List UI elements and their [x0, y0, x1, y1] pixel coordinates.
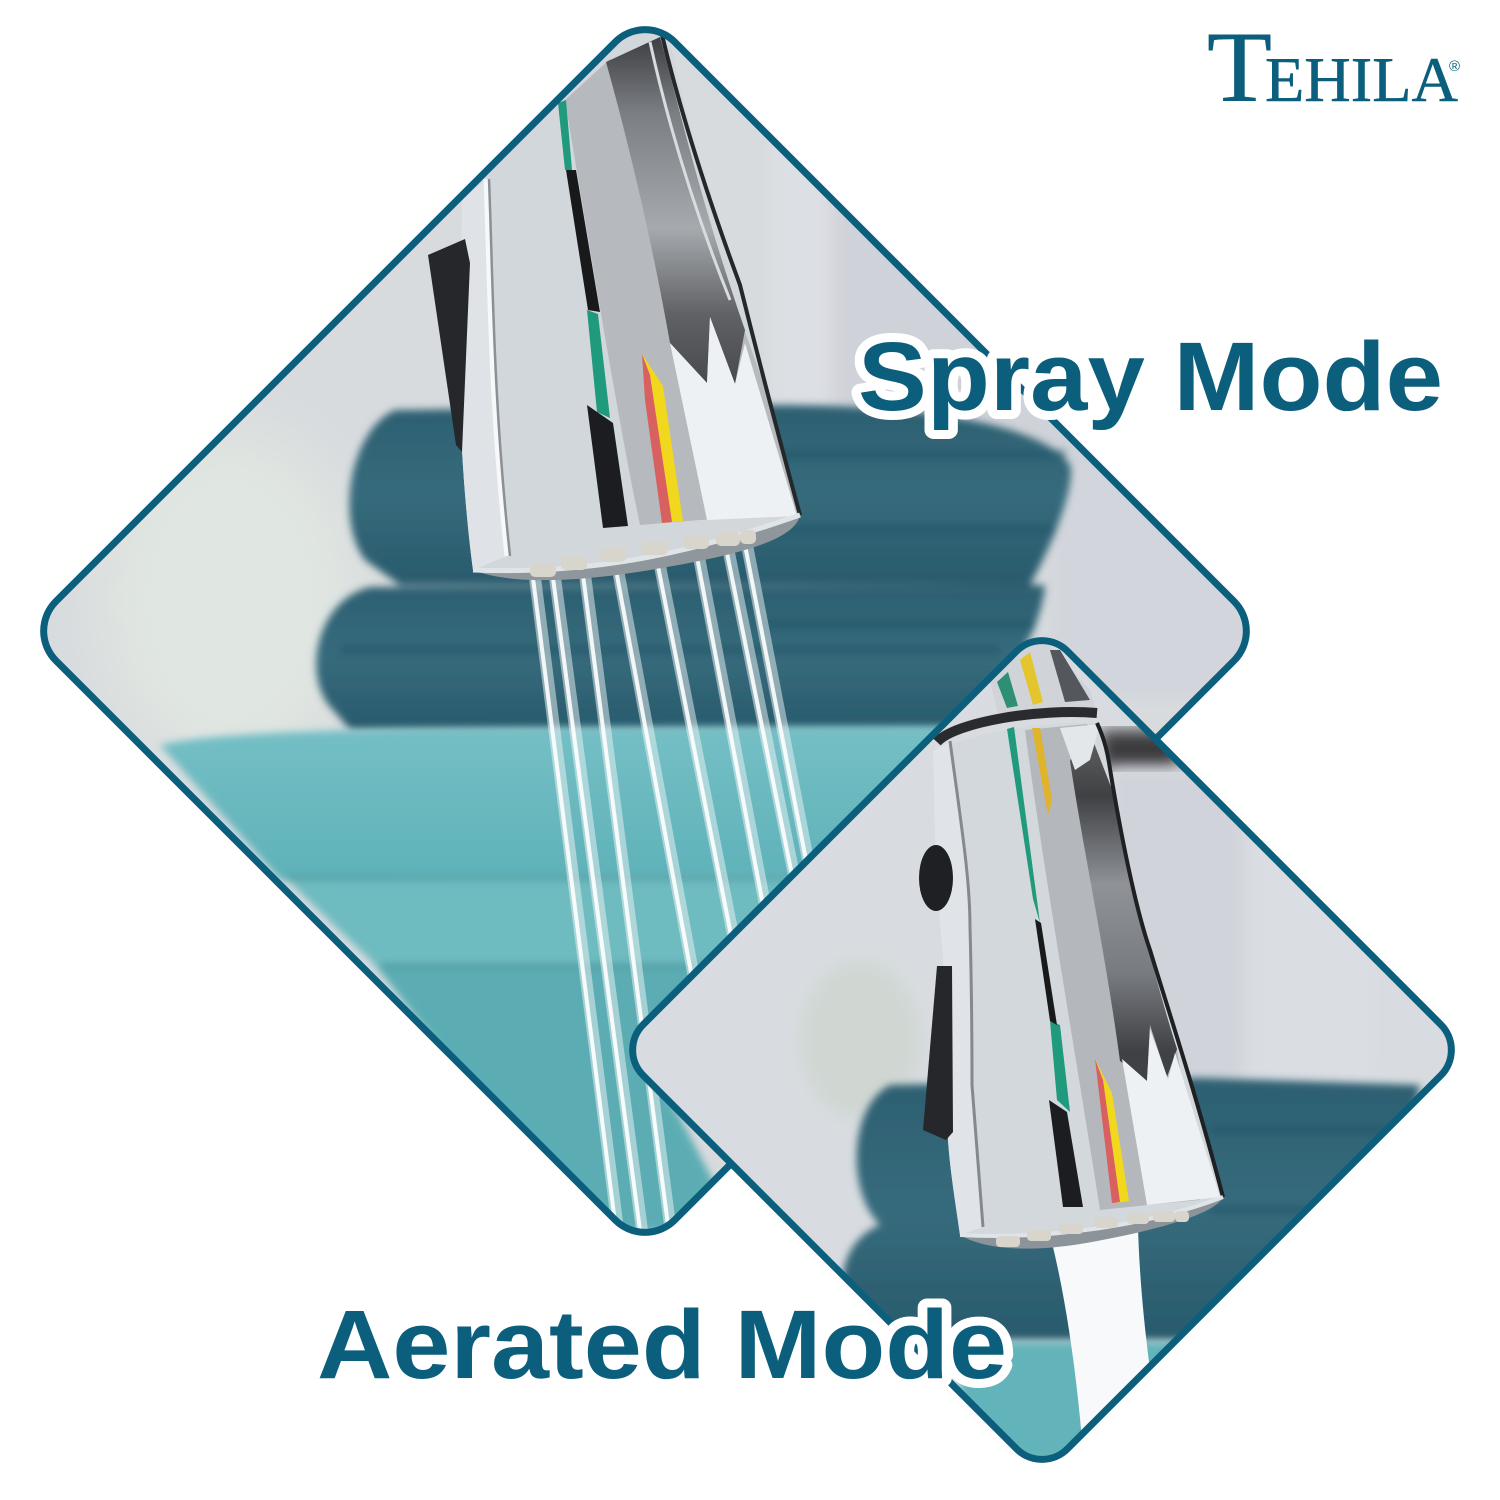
reflection: white highlights: [670, 317, 797, 520]
logo: Tehila: T: [1207, 11, 1272, 123]
photo background: [47, 42, 1243, 1180]
reflection: black stripes: [566, 170, 600, 312]
logo: Tehila: EHILA: [1265, 45, 1458, 115]
label: Aerated Mode: Aerated Mode: [317, 1290, 1007, 1399]
reflection: coloured stripes: [1095, 1059, 1129, 1203]
black lever: [428, 239, 470, 452]
nozzles: [996, 1211, 1189, 1247]
water jets: [533, 545, 808, 1230]
light teal towel stack: [160, 726, 960, 1232]
rim underside: [960, 1197, 1223, 1249]
photo background: [636, 649, 1448, 1390]
black pause button: [919, 845, 953, 911]
faucet head, spray mode: [460, 20, 800, 580]
dark towel stack: [316, 405, 1071, 730]
logo: Tehila: [1207, 11, 1460, 123]
reflection: black stripes: [1035, 919, 1057, 1025]
upper tube: [990, 635, 1097, 722]
water stream: [1053, 1232, 1149, 1430]
nozzles: [530, 530, 756, 577]
body: [933, 723, 1223, 1238]
panel: aerated mode photo: [618, 626, 1470, 1480]
body: [462, 402, 789, 570]
black lever: [923, 966, 953, 1140]
rim underside: [473, 515, 800, 580]
reflection: white highlights: [1122, 1029, 1220, 1205]
reflection: coloured stripes: [642, 354, 683, 523]
label: Spray Mode: Spray Mode: [858, 322, 1443, 431]
dark towel stack: [842, 1078, 1420, 1340]
faucet head, aerated mode: [933, 635, 1223, 1249]
light teal towel: [954, 1340, 1171, 1456]
collar ring: [937, 712, 1097, 742]
logo: Tehila: ®: [1449, 58, 1460, 75]
panel: spray mode photo: [40, 26, 1250, 1236]
